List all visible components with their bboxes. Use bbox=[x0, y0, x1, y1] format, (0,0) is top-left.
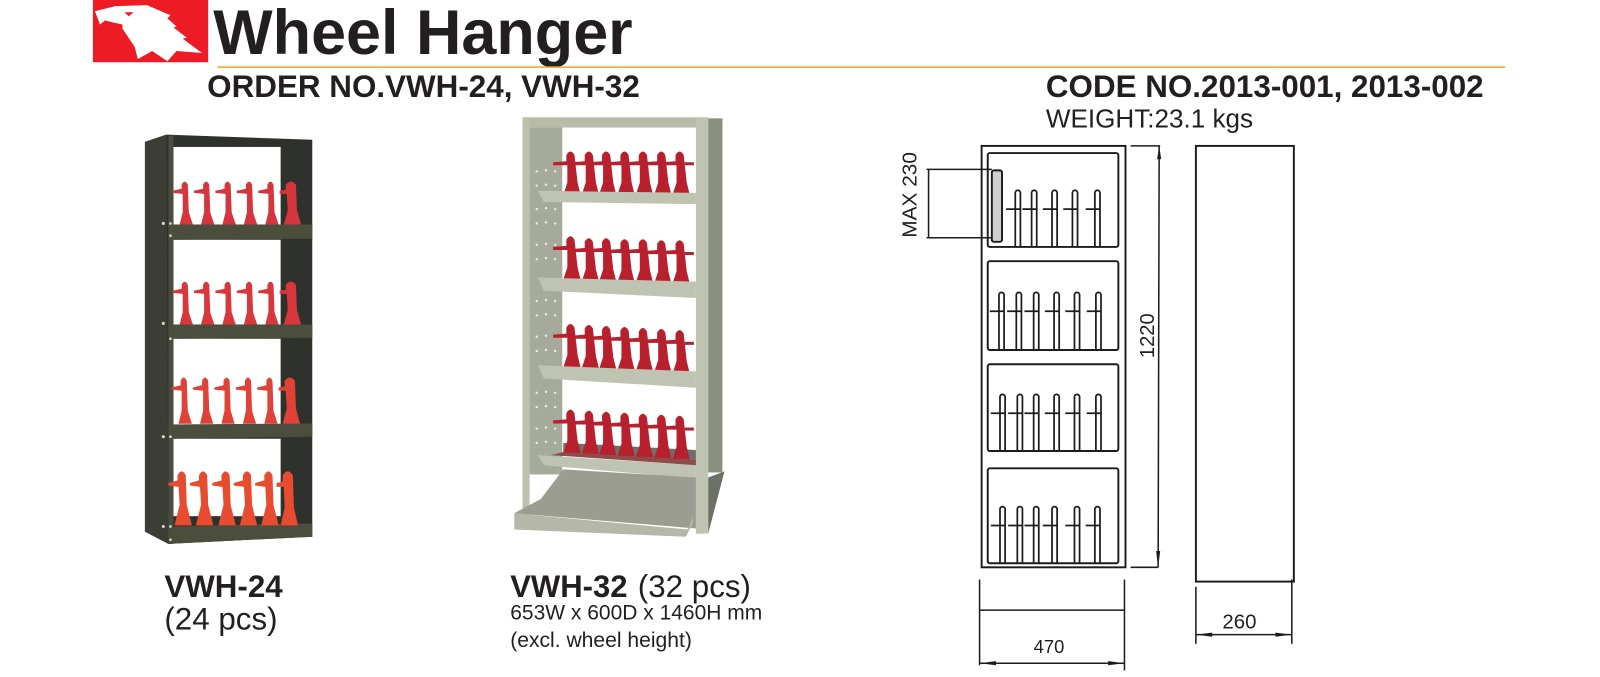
logo: red eagle bbox=[93, 0, 208, 62]
dimension: width 470 bbox=[980, 580, 1124, 670]
caption: VWH-24 bbox=[164, 569, 283, 637]
dimension: max 230 bbox=[899, 152, 992, 238]
title: Wheel Hanger bbox=[213, 0, 633, 68]
hangers: VWH-32 shelf 2 bbox=[553, 236, 694, 284]
dimension: width 470: 470 bbox=[1034, 636, 1064, 657]
hanger slots row 3 bbox=[991, 394, 1101, 451]
hanger slots row 4 bbox=[991, 507, 1100, 563]
dimension: height 1220: 1220 bbox=[1137, 313, 1159, 358]
wheel outline bbox=[992, 170, 1002, 242]
caption: VWH-32: 653W x 600D x 1460H mm bbox=[510, 601, 762, 624]
weight: WEIGHT:23.1 kgs bbox=[1046, 106, 1253, 134]
order number: ORDER NO.VWH-24, VWH-32 bbox=[207, 69, 640, 104]
hangers: VWH-24 shelf 3 bbox=[171, 378, 300, 424]
hangers: VWH-32 shelf 3 bbox=[553, 324, 694, 373]
caption: VWH-24: VWH-24 bbox=[164, 569, 283, 604]
orange divider bbox=[217, 66, 1505, 68]
caption: VWH-32: (32 pcs) bbox=[638, 569, 751, 604]
caption: VWH-32: VWH-32 bbox=[510, 569, 628, 604]
drip tray bbox=[514, 469, 696, 537]
dimension: depth 260 bbox=[1196, 580, 1292, 644]
dimension: max 230: MAX 230 bbox=[899, 152, 921, 238]
product photo: VWH-32 grey rack bbox=[514, 117, 724, 537]
hanger slots row 1 bbox=[1006, 190, 1100, 247]
hangers: VWH-32 shelf 1 bbox=[553, 152, 694, 195]
hangers: VWH-32 shelf 4 bbox=[553, 410, 696, 461]
mounting bolts bbox=[162, 222, 172, 541]
perforation holes bbox=[536, 169, 556, 444]
technical drawing: side view bbox=[1196, 146, 1294, 582]
hangers: VWH-24 shelf 4 bbox=[168, 471, 298, 525]
hangers: VWH-24 shelf 1 bbox=[172, 182, 301, 224]
caption: VWH-24: (24 pcs) bbox=[164, 602, 278, 637]
caption: VWH-32 bbox=[510, 569, 762, 652]
dimension: height 1220 bbox=[1131, 146, 1161, 567]
technical drawing: front view bbox=[982, 146, 1125, 567]
hanger slots row 2 bbox=[990, 292, 1101, 349]
product photo: VWH-24 dark rack bbox=[145, 135, 312, 544]
dimension: depth 260: 260 bbox=[1222, 612, 1256, 634]
hangers: VWH-24 shelf 2 bbox=[172, 282, 301, 324]
caption: VWH-32: (excl. wheel height) bbox=[510, 629, 692, 652]
code number: CODE NO.2013-001, 2013-002 bbox=[1046, 69, 1484, 104]
